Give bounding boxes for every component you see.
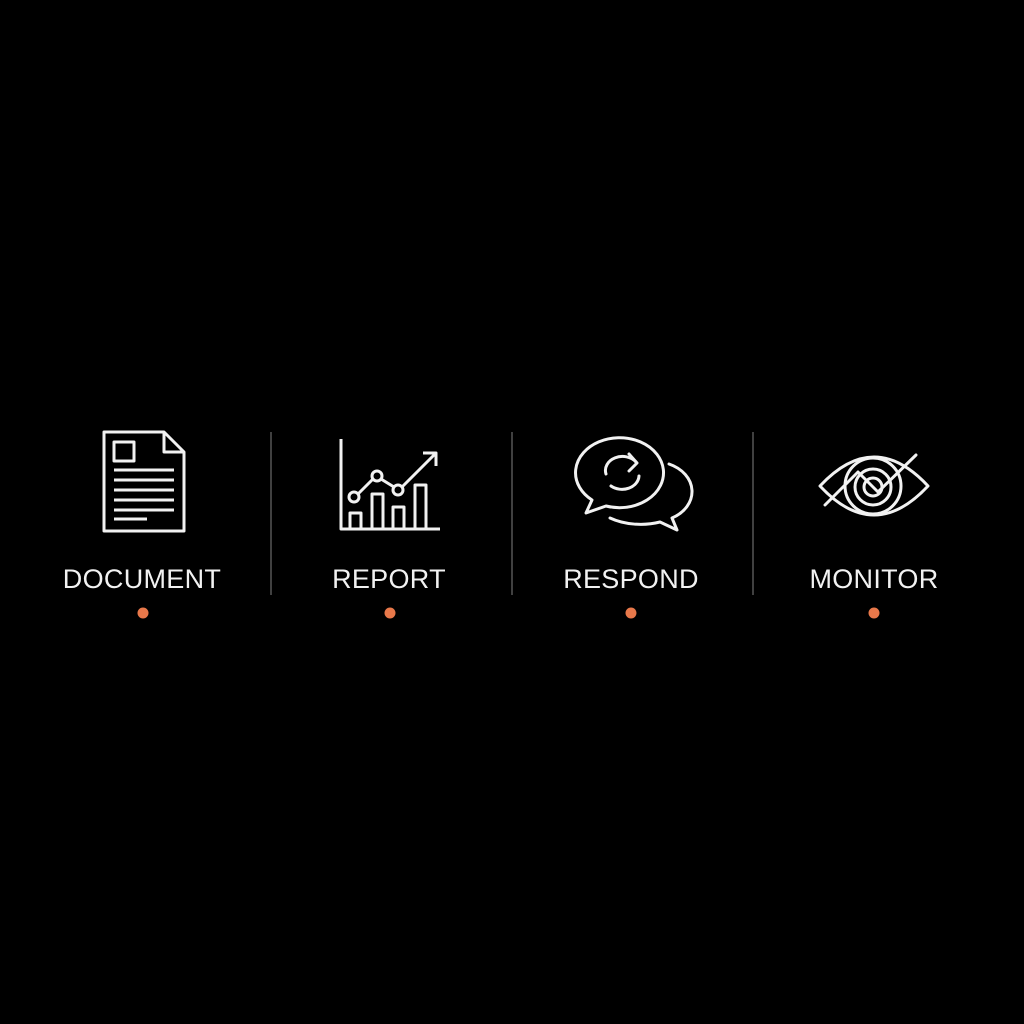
label: monitor: MONITOR [809, 564, 939, 594]
panel: respond [563, 438, 699, 618]
dot [384, 608, 396, 618]
icon: chat bubbles [576, 438, 692, 530]
icon: eye [820, 455, 928, 515]
label: respond: RESPOND [563, 564, 699, 594]
dot [626, 608, 636, 618]
panel: document [63, 432, 221, 618]
dot [868, 608, 880, 618]
panel: report [332, 439, 446, 618]
icon: chart [341, 439, 440, 529]
icon: document [104, 432, 184, 531]
dot [138, 608, 148, 618]
panel: monitor [809, 455, 939, 618]
label: report: REPORT [332, 564, 446, 594]
label: document: DOCUMENT [63, 564, 221, 594]
